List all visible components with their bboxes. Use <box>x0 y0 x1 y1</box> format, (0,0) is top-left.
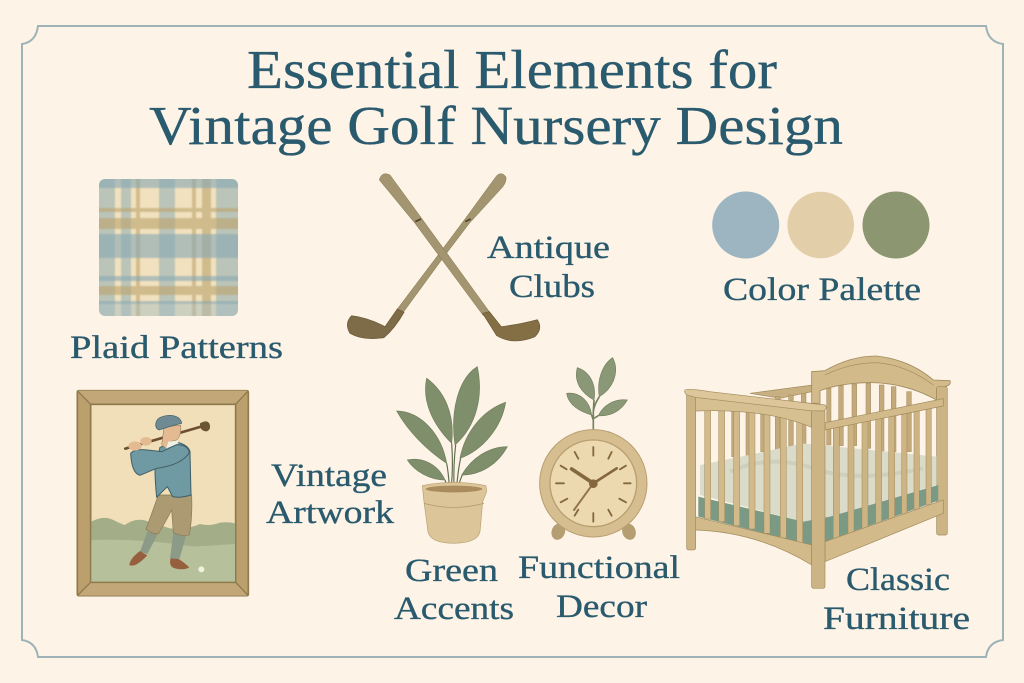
panel: plaid patterns <box>70 175 283 366</box>
label: antique clubs <box>487 230 610 305</box>
label: functional decor: Decor <box>556 589 647 625</box>
swatch: beige <box>787 192 854 258</box>
label: vintage artwork: Artwork <box>266 495 395 531</box>
label: vintage artwork <box>266 458 395 531</box>
swatch: green <box>862 192 930 258</box>
label: plaid patterns: Plaid Patterns <box>70 330 283 366</box>
label: green accents <box>394 553 514 627</box>
headboard <box>812 356 950 403</box>
icon: potted plant <box>397 367 507 543</box>
plaid swatch <box>99 179 238 316</box>
framed golfer picture <box>77 391 248 596</box>
back rail <box>750 384 820 398</box>
panel: vintage artwork <box>77 391 395 596</box>
mattress <box>700 443 937 522</box>
label: antique clubs: Clubs <box>509 269 595 305</box>
label: antique clubs: Antique <box>487 230 610 266</box>
title: Essential Elements for <box>247 39 777 100</box>
label: classic furniture <box>823 562 970 637</box>
label: vintage artwork: Vintage <box>271 458 387 494</box>
label: green accents: Green <box>405 553 498 589</box>
label: green accents: Accents <box>394 591 514 627</box>
label: classic furniture: Classic <box>846 562 950 598</box>
right panel <box>833 407 931 540</box>
title: Vintage Golf Nursery Design <box>149 95 843 156</box>
icon: crossed golf clubs <box>347 174 540 341</box>
label: functional decor: Functional <box>518 550 680 586</box>
panel: antique clubs <box>347 174 610 341</box>
swatch: blue <box>712 192 779 258</box>
title <box>149 39 843 156</box>
back slats <box>732 383 911 457</box>
label: classic furniture: Furniture <box>823 601 970 637</box>
icon: crib <box>685 356 950 588</box>
icon: clock with sprig <box>540 358 647 542</box>
panel: color palette <box>712 192 930 308</box>
panel: green accents <box>394 367 514 627</box>
golfer figure <box>125 415 210 569</box>
front panel <box>705 410 803 543</box>
label: color palette: Color Palette <box>723 272 921 308</box>
panel: classic furniture <box>685 356 970 637</box>
label: functional decor <box>518 550 680 625</box>
panel: functional decor <box>518 358 680 625</box>
